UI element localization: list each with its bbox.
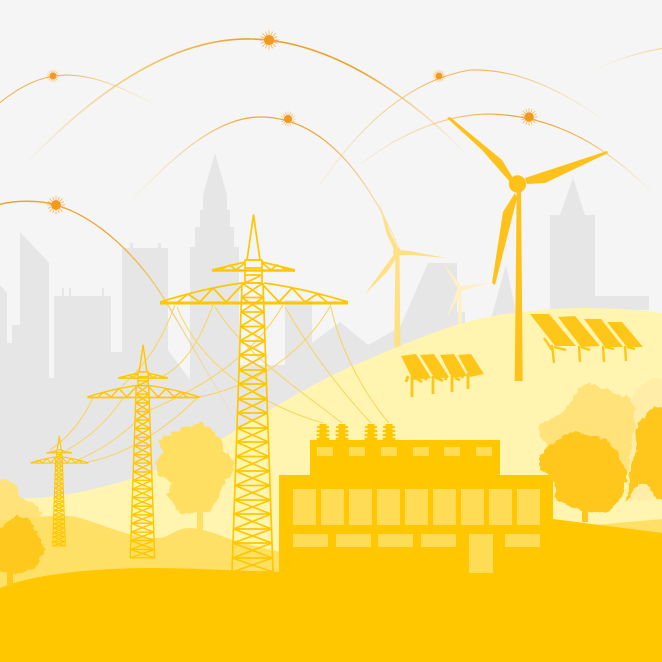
lines middle to small pylon bbox=[50, 398, 197, 462]
node: right upper bbox=[433, 70, 445, 82]
pylon: medium bbox=[87, 345, 199, 558]
pylon: small bbox=[30, 436, 88, 546]
ground bbox=[0, 519, 662, 662]
mid hill bbox=[0, 516, 662, 662]
blade: lower bbox=[492, 193, 517, 285]
tree: pale right bbox=[537, 382, 635, 480]
blade: upper left bbox=[447, 117, 513, 182]
wind turbine: medium bbox=[365, 202, 446, 360]
arc: left bbox=[0, 201, 240, 430]
node: right lower bbox=[520, 108, 538, 126]
arc: long top arc bbox=[23, 39, 470, 167]
arc: centre bbox=[125, 117, 400, 250]
tree: pale centre bbox=[155, 423, 233, 531]
wind turbine: small distant bbox=[443, 263, 490, 353]
node: upper left bbox=[47, 70, 59, 82]
power lines bbox=[50, 305, 389, 462]
arc: top right corner bbox=[595, 48, 662, 70]
wind turbine: large bbox=[447, 117, 608, 381]
pale hill bbox=[0, 308, 662, 662]
panel surfaces bbox=[530, 314, 643, 347]
signal arcs with glowing nodes bbox=[0, 39, 662, 430]
panel surfaces bbox=[401, 354, 484, 380]
lines to building bbox=[177, 307, 389, 423]
substation building bbox=[279, 424, 553, 600]
tree: dark right bbox=[540, 432, 628, 522]
solar panels: left group bbox=[401, 354, 484, 397]
pylon: large bbox=[160, 215, 348, 572]
panel legs bbox=[406, 373, 468, 397]
blade: right bbox=[525, 151, 608, 184]
panel legs bbox=[544, 338, 635, 363]
building body bbox=[279, 440, 553, 600]
arc: right upper bbox=[320, 70, 610, 185]
windows bbox=[293, 447, 540, 573]
node: centre bbox=[280, 111, 296, 127]
node: left bbox=[47, 196, 65, 214]
hub bbox=[509, 175, 526, 193]
insulators bbox=[316, 424, 396, 440]
node: top arc bbox=[259, 30, 279, 50]
arc: small upper left bbox=[0, 75, 160, 108]
tree: pale left back bbox=[0, 478, 43, 545]
mast bbox=[515, 190, 523, 381]
lines big to middle pylon bbox=[122, 305, 331, 410]
solar panels: right group bbox=[530, 314, 643, 363]
tree: dark far right bbox=[627, 407, 662, 503]
tree: faint far right bbox=[630, 377, 662, 500]
arc: right lower bbox=[362, 114, 655, 195]
city skyline bbox=[0, 153, 649, 500]
tree: dark front left bbox=[0, 515, 45, 586]
